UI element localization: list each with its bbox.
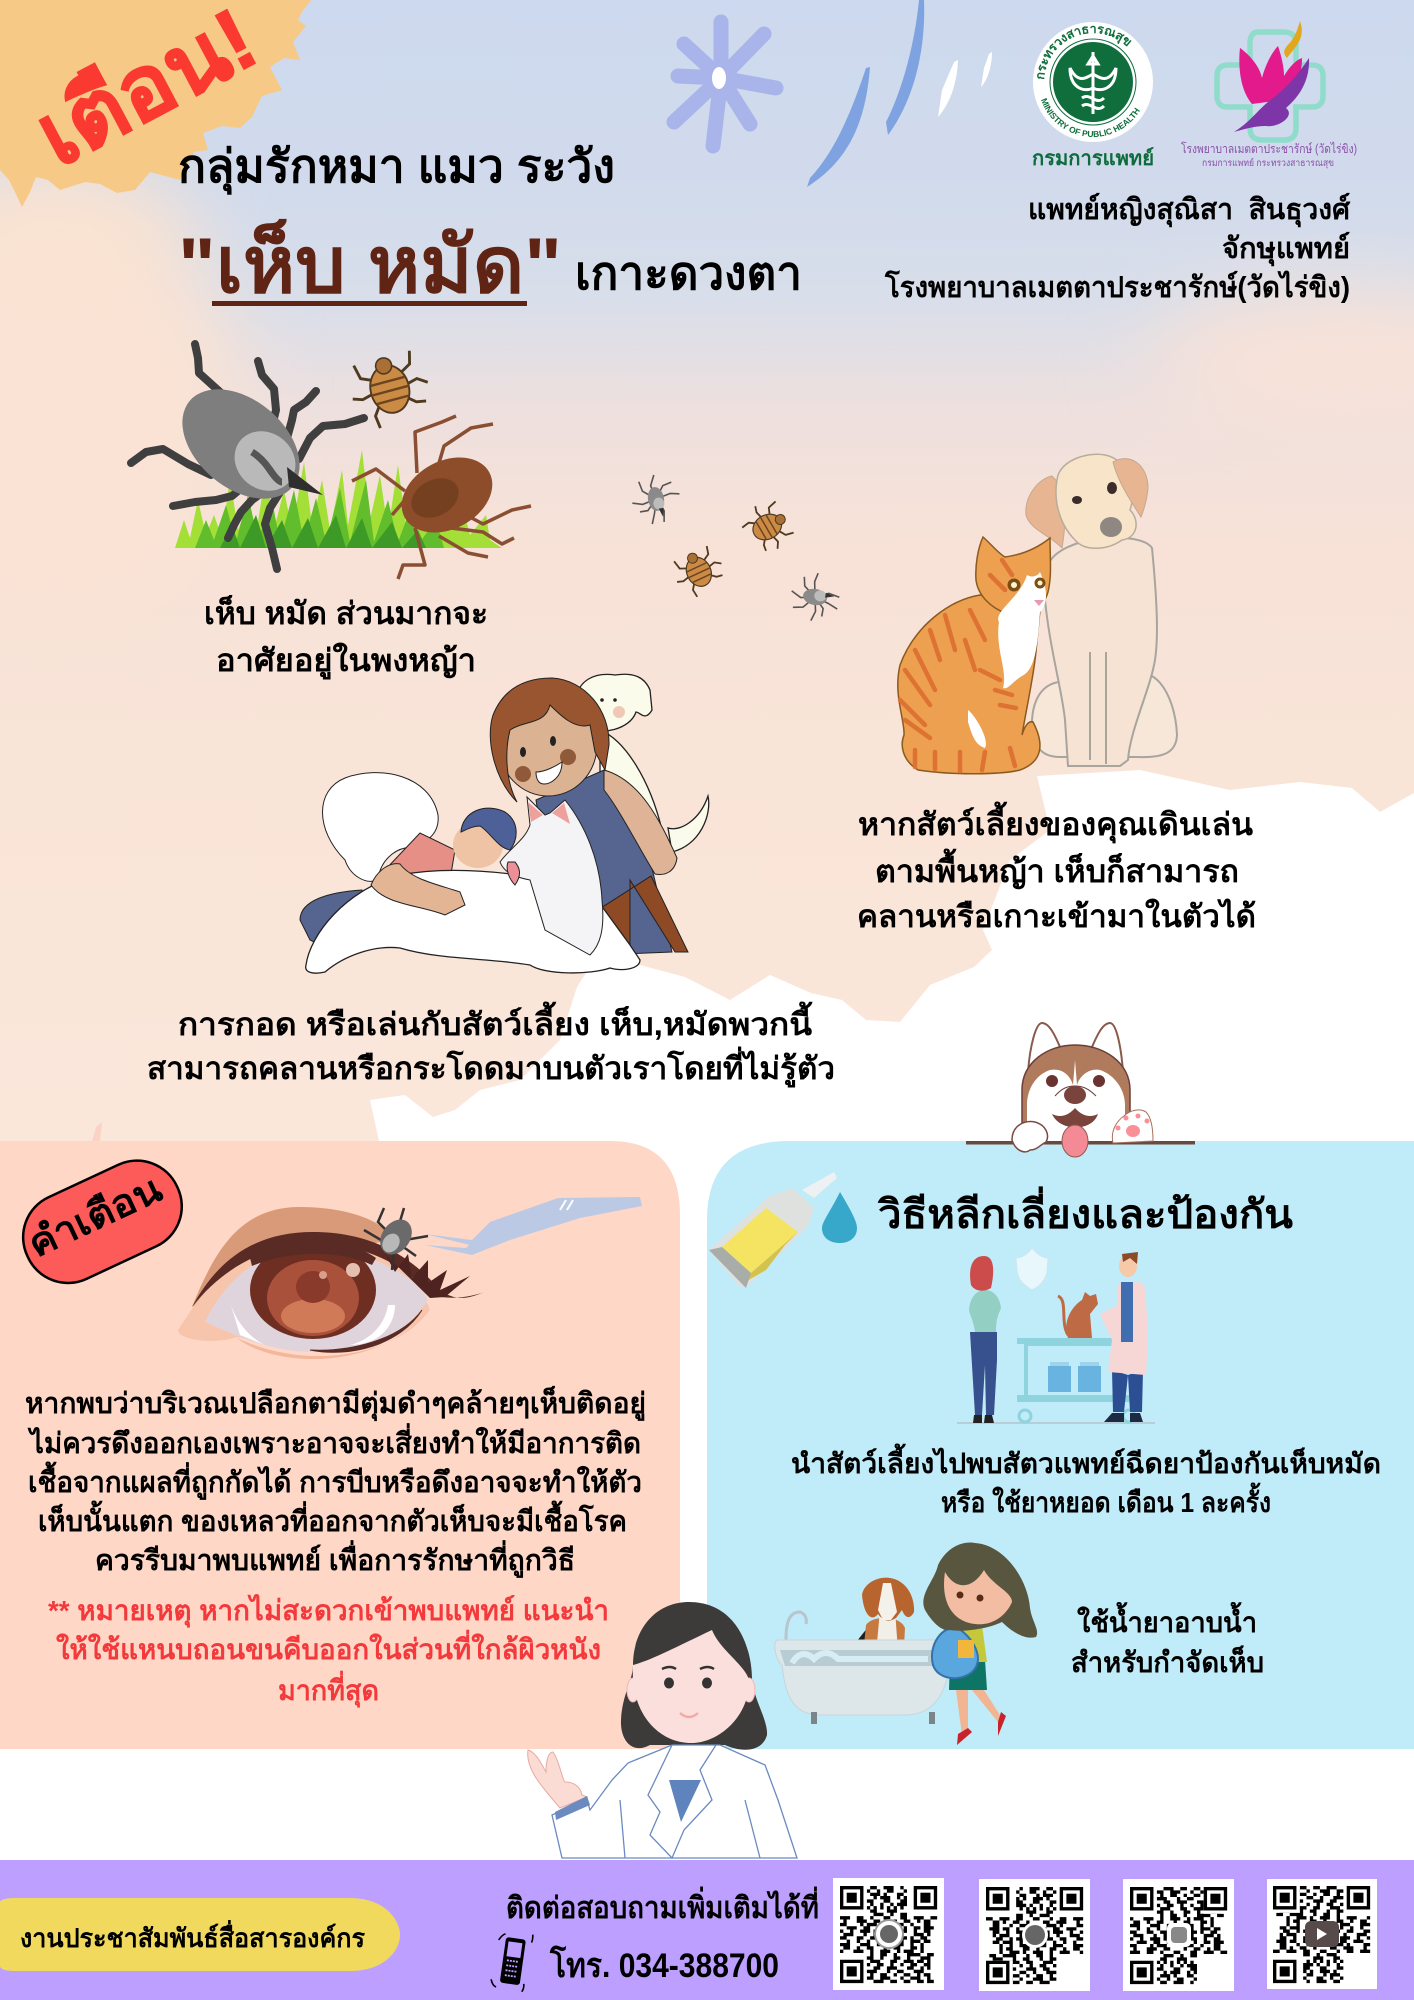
- text: ticks live in grass: เห็บ หมัด ส่วนมากจะ: [204, 594, 488, 631]
- logo: ministry of public health: กรมการแพทย์: [1032, 147, 1154, 170]
- text: vet advice: [791, 1443, 1381, 1518]
- text: phone number: โทร. 034-388700: [549, 1945, 779, 1985]
- text: red note: ให้ใช้แหนบถอนขนคีบออกในส่วนที่ใกล้ผิวหนัง: [56, 1629, 601, 1665]
- warning badge: คำเตือน: [22, 1168, 169, 1266]
- text: warning body: ควรรีบมาพบแพทย์ เพื่อการรักษาที่ถูกวิธี: [95, 1540, 575, 1578]
- logo: ministry of public health: กระทรวงสาธารณสุข: [1037, 26, 1132, 80]
- icon: mobile phone: [490, 1930, 533, 1992]
- QR code: youtube: [1267, 1879, 1377, 1989]
- text: warning body: ไม่ควรดึงออกเองเพราะอาจจะเสี่ยงทำให้มีอาการติด: [27, 1423, 641, 1460]
- text: warning body: เชื้อจากแผลที่ถูกกัดได้ การบีบหรือดึงอาจจะทำให้ตัว: [28, 1461, 642, 1500]
- small ticks and fleas: [628, 471, 843, 625]
- text: hugging pets: สามารถคลานหรือกระโดดมาบนตัวเราโดยที่ไม่รู้ตัว: [147, 1046, 835, 1088]
- heading: tick and flea: "เห็บ หมัด": [178, 219, 562, 309]
- author credit: [884, 192, 1351, 304]
- QR code: facebook: [979, 1879, 1090, 1991]
- icon: dropper bottle: [709, 1172, 837, 1288]
- illustration: doctor: [528, 1602, 797, 1858]
- illustration: bathing dog and girl: [775, 1543, 1037, 1745]
- text: red note: ** หมายเหตุ หากไม่สะดวกเข้าพบแพทย์ แนะนำ: [48, 1594, 609, 1628]
- text: use flea shampoo: สำหรับกำจัดเห็บ: [1071, 1645, 1264, 1678]
- decorative star flower: [674, 22, 776, 146]
- logo: ministry of public health: [1032, 22, 1154, 170]
- logo: ministry of public health: MINISTRY OF PUBLIC HEALTH: [1041, 98, 1140, 138]
- heading: on the eyeball: เกาะดวงตา: [575, 247, 802, 299]
- text: pets walking in grass: หากสัตว์เลี้ยงของคุณเดินเล่น: [858, 801, 1253, 844]
- QR code: website: [833, 1878, 944, 1990]
- text: warning body: เห็บนั้นแตก ของเหลวที่ออกจากตัวเห็บจะมีเชื้อโรค: [38, 1500, 627, 1538]
- label: public relations pill: [0, 1898, 400, 1971]
- logo: metta hospital: กรมการแพทย์ กระทรวงสาธารณสุข: [1202, 157, 1334, 169]
- text: contact: ติดต่อสอบถามเพิ่มเติมได้ที่: [506, 1886, 819, 1925]
- illustration: ticks in grass: [131, 344, 531, 579]
- background watercolor wash: [0, 0, 1414, 1141]
- illustration: husky peeking: [966, 1023, 1195, 1157]
- text: ticks live in grass: [204, 594, 488, 680]
- text: ticks live in grass: อาศัยอยู่ในพงหญ้า: [216, 642, 476, 680]
- logo: metta hospital: [1181, 21, 1357, 169]
- text: red note: มากที่สุด: [278, 1670, 379, 1708]
- text: use flea shampoo: ใช้น้ำยาอาบน้ำ: [1077, 1601, 1257, 1638]
- QR code: line: [1123, 1879, 1234, 1991]
- orange splash behind warning word: [0, 0, 311, 207]
- text: pets walking in grass: คลานหรือเกาะเข้ามาในตัวได้: [857, 898, 1256, 934]
- text: vet advice: นำสัตว์เลี้ยงไปพบสัตวแพทย์ฉีดยาป้องกันเห็บหมัด: [791, 1443, 1381, 1479]
- panel: prevention: [707, 1141, 1414, 1749]
- illustration: vet with cat: [957, 1248, 1155, 1424]
- warning badge: [9, 1146, 196, 1297]
- heading: prevention: วิธีหลีกเลี่ยงและป้องกัน: [877, 1186, 1293, 1237]
- footer band: [0, 1860, 1414, 2000]
- text: warning body: หากพบว่าบริเวณเปลือกตามีตุ่มดำๆคล้ายๆเห็บติดอยู่: [25, 1385, 646, 1421]
- author credit: โรงพยาบาลเมตตาประชารักษ์(วัดไร่ขิง): [884, 269, 1350, 304]
- text: hugging pets: [147, 1001, 835, 1088]
- icon: water drop: [822, 1192, 857, 1243]
- illustration: cat and dog: [898, 454, 1177, 774]
- illustration: girl, boy and pets: [300, 674, 709, 973]
- author credit: จักษุแพทย์: [1222, 231, 1350, 266]
- decorative brush strokes: [807, 0, 992, 187]
- illustration: eye with tick and tweezers: [178, 1197, 642, 1359]
- text: pets walking in grass: ตามพื้นหญ้า เห็บก็สามารถ: [875, 848, 1239, 890]
- logo: metta hospital: โรงพยาบาลเมตตาประชารักษ์ (วัดไร่ขิง): [1181, 141, 1357, 156]
- text: warning body: [25, 1385, 646, 1578]
- panel: warning: [0, 1141, 680, 1749]
- label: public relations pill: งานประชาสัมพันธ์สื่อสารองค์กร: [20, 1919, 365, 1953]
- heading: title line 1: กลุ่มรักหมา แมว ระวัง: [178, 140, 615, 195]
- text: use flea shampoo: [1071, 1601, 1264, 1678]
- author credit: แพทย์หญิงสุณิสา สินธุวงศ์: [1028, 192, 1351, 227]
- text: pets walking in grass: [857, 801, 1256, 934]
- text: red note: [48, 1594, 609, 1708]
- text: vet advice: หรือ ใช้ยาหยอด เดือน 1 ละครั้ง: [941, 1482, 1271, 1518]
- text: hugging pets: การกอด หรือเล่นกับสัตว์เลี้ยง เห็บ,หมัดพวกนี้: [178, 1001, 813, 1042]
